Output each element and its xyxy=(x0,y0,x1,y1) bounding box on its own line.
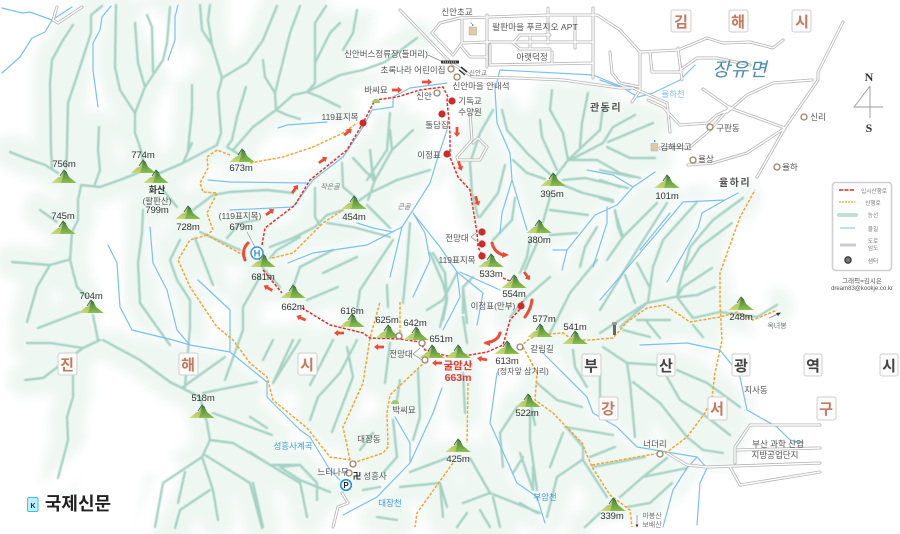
title mark: 국제신문 logo: 국제신문 xyxy=(45,494,111,514)
place labels: 초록나라 어린이집 xyxy=(381,65,445,75)
legend: 입시산행로 xyxy=(861,187,887,195)
peak: 616m: 616m xyxy=(340,306,364,317)
region tag: 강서구: 서 xyxy=(710,401,724,418)
place labels: 卍 xyxy=(353,471,361,481)
place labels: 이정표(만부) xyxy=(471,301,516,311)
peak: 518m: 518m xyxy=(191,393,215,404)
peak: 554m xyxy=(502,275,526,300)
place labels: 김해외고 xyxy=(660,142,692,152)
compass: S xyxy=(866,121,873,135)
peak: 380m: 380m xyxy=(527,235,551,246)
peak: 248m: 248m xyxy=(729,312,753,323)
peak: 681m: 681m xyxy=(251,272,275,283)
region tag: 부산광역시: 부 xyxy=(584,358,598,375)
place labels: 신안교 xyxy=(469,68,487,77)
place labels: 부산 과학 산업 xyxy=(752,439,804,449)
peak: 774m xyxy=(130,150,156,173)
peak: 533m xyxy=(478,254,504,280)
place labels: 작은골 xyxy=(320,183,340,191)
curved switchback arrows xyxy=(244,243,532,346)
region tag: 강서구 xyxy=(599,397,836,420)
peak: 101m xyxy=(654,175,680,202)
tomb marker: 박씨묘: 박씨묘 xyxy=(392,405,416,415)
peak: 681m xyxy=(250,254,276,283)
peak: 745m: 745m xyxy=(51,211,75,222)
place labels: 수양원 xyxy=(458,107,482,117)
peak: 541m xyxy=(562,322,588,344)
peak: 518m xyxy=(190,393,215,418)
waypoint: 헬기장 679m: H xyxy=(254,248,261,260)
icon: parking P xyxy=(341,480,351,490)
peak: 673m: 673m xyxy=(229,163,253,174)
peak: 380m xyxy=(526,220,552,246)
peak: 화산 799m: (팔판산) xyxy=(142,196,172,206)
tomb marker: 박씨묘 xyxy=(391,400,416,415)
region tag: 부산광역시: 광 xyxy=(734,358,748,375)
legend: 능선 xyxy=(868,211,878,219)
place labels: 보배산 xyxy=(642,520,662,529)
main recommended trail (red) xyxy=(262,87,522,356)
peak: 728m xyxy=(176,206,200,233)
place labels: 신안버스정류장(들머리) xyxy=(344,49,428,59)
icon: parking P: P xyxy=(343,481,349,490)
peak: 395m xyxy=(540,173,566,200)
region tag: 진해시 xyxy=(58,353,317,375)
region tag: 부산광역시: 역 xyxy=(806,358,820,375)
place labels: 율하 xyxy=(782,162,798,172)
waypoint: 헬기장 679m xyxy=(219,211,263,260)
region tag: 강서구: 구 xyxy=(819,401,833,418)
peak: 613m: 613m xyxy=(495,356,519,367)
place labels: 119표지목 xyxy=(438,255,476,265)
peak: 554m: 554m xyxy=(502,289,526,300)
peak: 642m: 642m xyxy=(403,318,427,329)
peak: 613m xyxy=(494,341,549,376)
place labels: 성흥사 xyxy=(363,471,387,481)
peak: 745m xyxy=(50,211,76,234)
peak: 522m: 522m xyxy=(515,408,539,419)
credit: dream83@kookje.co.kr xyxy=(831,286,893,292)
peak: 395m: 395m xyxy=(540,189,564,200)
place labels: 대장동 xyxy=(357,434,381,444)
water labels: 성흥사계곡 xyxy=(273,441,313,451)
place labels: 율상 xyxy=(698,154,714,164)
region tag: 진해시: 진 xyxy=(60,357,74,374)
water labels: 대장천 xyxy=(378,498,402,508)
peak: 662m xyxy=(280,285,306,313)
peak: 454m xyxy=(342,196,366,223)
place labels: 신안초교 xyxy=(441,7,473,17)
legend: 도로 xyxy=(868,238,878,245)
credit xyxy=(831,276,893,292)
peak: 642m xyxy=(403,318,428,340)
place labels: 옥녀봉 xyxy=(767,321,787,330)
region tag: 강서구: 강 xyxy=(601,401,615,418)
peak: 248m xyxy=(728,297,754,323)
place labels: 기독교 xyxy=(458,96,482,106)
peak: 425m: 425m xyxy=(446,454,470,465)
place labels: 아랫덕정 xyxy=(516,52,548,62)
peak: 454m: 454m xyxy=(342,212,366,223)
peak: 화산 799m: 799m xyxy=(145,205,169,216)
peak: 651m xyxy=(420,334,453,358)
peak: 651m: 651m xyxy=(429,334,453,345)
place labels: 관동리 xyxy=(590,102,622,114)
place labels: 마봉산 xyxy=(642,511,662,520)
peak: 101m: 101m xyxy=(655,191,679,202)
legend: 샘터 xyxy=(868,257,878,265)
icon: school 김해외고 xyxy=(651,140,658,151)
peak: 673m xyxy=(229,149,254,174)
compass xyxy=(854,70,883,135)
peak: 625m: 625m xyxy=(375,315,399,326)
peak: 541m: 541m xyxy=(563,322,587,333)
legend: 산행로 xyxy=(865,199,881,207)
peak: 774m: 774m xyxy=(131,150,155,161)
legend: 임도 xyxy=(868,244,878,252)
water labels xyxy=(273,89,685,508)
place labels: 지방공업단지 xyxy=(752,450,798,460)
peak: 522m xyxy=(515,394,540,419)
peak: 화산 799m: 화산 xyxy=(149,184,166,195)
peak: 굴암산 663m xyxy=(444,345,473,384)
place labels: 구판동 xyxy=(716,123,740,133)
place labels: 신안마을 안내석 xyxy=(452,81,510,91)
peak: 613m: (정자앞 삼거리) xyxy=(497,366,549,376)
place labels: 너더리 xyxy=(643,439,667,449)
region tag: 부산광역시 xyxy=(582,354,898,376)
peak: 625m xyxy=(375,315,400,338)
waypoint: 헬기장 679m: (119표지목) xyxy=(219,211,261,221)
place labels: 돌담집 xyxy=(425,120,449,130)
region tag: 부산광역시: 산 xyxy=(659,358,673,375)
peak: 화산 799m xyxy=(142,170,172,216)
peak: 616m xyxy=(340,306,364,327)
place labels: 느티나무 xyxy=(317,467,349,477)
small arrowheads xyxy=(636,312,781,528)
peak: 577m xyxy=(528,314,556,337)
place labels: 큰골 xyxy=(398,203,411,211)
place labels: 율하리 xyxy=(719,176,751,189)
icon: tower xyxy=(612,322,617,335)
peak: 756m: 756m xyxy=(52,159,76,170)
place labels: 팔판마을 푸르지오 APT xyxy=(492,21,579,32)
region tag: 김해시: 해 xyxy=(731,14,745,31)
compass: N xyxy=(865,70,874,84)
icon: school 신안초교 xyxy=(469,22,476,35)
place labels: 전망대 xyxy=(445,233,469,243)
district label: 장유면: 장유면 xyxy=(712,60,769,81)
region tag: 진해시: 해 xyxy=(181,357,195,374)
place labels: 갈림길 xyxy=(530,344,554,354)
peak: 728m: 728m xyxy=(176,222,200,233)
region tag: 진해시: 시 xyxy=(300,357,314,374)
tomb marker: 바씨묘 xyxy=(364,85,388,103)
optional trails (orange) xyxy=(178,123,777,527)
waypoint: 헬기장 679m: 679m xyxy=(229,222,253,233)
peak: 425m xyxy=(446,439,470,465)
peak: 704m xyxy=(78,291,104,313)
peak: 533m: 533m xyxy=(479,269,503,280)
legend: 물길 xyxy=(868,225,878,233)
place labels: 신안 xyxy=(416,91,432,101)
region tag: 김해시: 시 xyxy=(795,14,809,31)
leader: 전망대 chevrons xyxy=(413,233,780,526)
place labels: 119표지목 xyxy=(321,112,359,122)
peak: 339m: 339m xyxy=(600,511,624,522)
credit: 그래픽=김시은 xyxy=(842,276,882,285)
peak: 577m: 577m xyxy=(532,314,556,325)
place labels: 지사동 xyxy=(744,385,768,395)
icon: bus stop xyxy=(428,55,467,75)
region tag: 김해시: 김 xyxy=(674,14,688,31)
place labels xyxy=(317,7,826,529)
place labels: 신리 xyxy=(810,112,826,122)
peak: 굴암산 663m: 663m xyxy=(445,372,471,384)
place labels: 이정표 xyxy=(417,150,441,160)
ring waypoint markers xyxy=(346,66,807,476)
region tag: 김해시 xyxy=(671,10,811,32)
region tag: 부산광역시: 시 xyxy=(882,358,896,375)
tomb marker: 바씨묘: 바씨묘 xyxy=(364,85,388,95)
peak: 756m xyxy=(52,159,76,183)
water labels: 부암천 xyxy=(533,492,557,502)
water labels: 율하천 xyxy=(661,89,685,99)
peak: 339m xyxy=(600,498,626,522)
peak: 662m: 662m xyxy=(281,302,305,313)
peak: 굴암산 663m: 굴암산 xyxy=(444,359,473,372)
place labels: 전망대 xyxy=(389,349,413,359)
direction arrows xyxy=(262,79,532,366)
peak: 704m: 704m xyxy=(79,291,103,302)
title mark: 국제신문 logo: K xyxy=(30,503,36,510)
legend xyxy=(832,182,892,270)
red waypoint markers xyxy=(359,97,525,310)
